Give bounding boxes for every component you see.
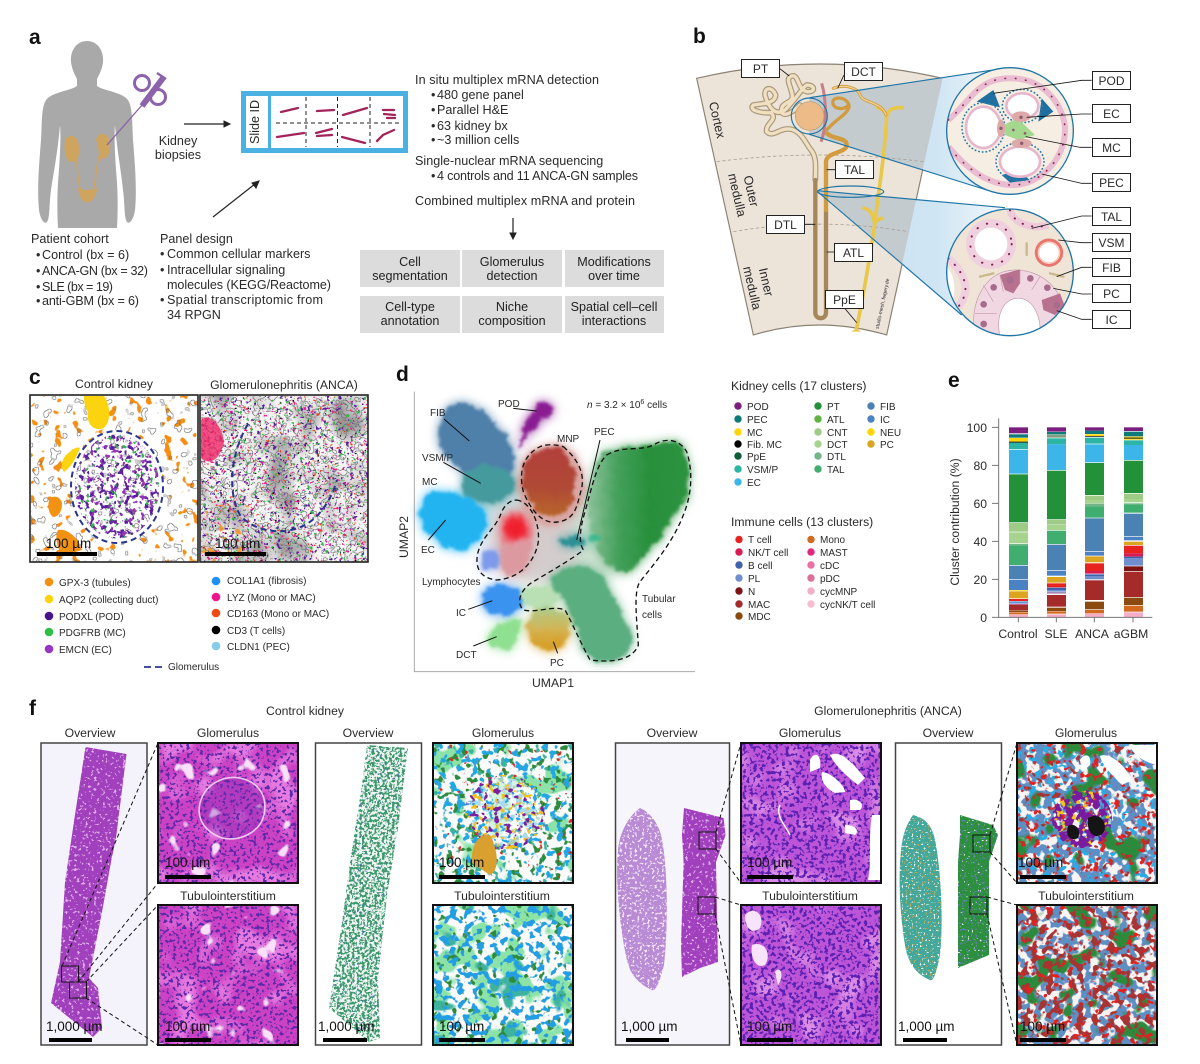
y tick labels: 100 — [967, 421, 987, 435]
text: patient cohort: ANCA-GN (bx = 32) — [42, 264, 148, 278]
legend: immune cells: pDC — [820, 574, 840, 585]
text: assay description: • — [431, 88, 435, 102]
legend: marker genes — [45, 576, 329, 673]
legend: marker genes: AQP2 (collecting duct) — [59, 595, 158, 606]
image: control glomerulus — [30, 395, 198, 562]
bar: ANCA — [1085, 427, 1104, 617]
ANCA cell map glomerulus: 100 µm — [1018, 855, 1063, 870]
UMAP labels: Tubular — [642, 594, 676, 605]
UMAP labels: PC — [550, 658, 564, 669]
region labels: Cortex — [706, 100, 728, 140]
slide with biopsies: Slide ID — [248, 100, 262, 144]
legend: kidney cells: POD — [747, 402, 769, 413]
zoom cones — [809, 68, 1010, 315]
legend: immune cells — [731, 515, 875, 623]
column titles: Tubulointerstitium — [180, 889, 276, 903]
legend: immune cells: T cell — [748, 535, 772, 546]
legend: kidney cells: Fib. MC — [747, 440, 782, 451]
UMAP labels: IC — [456, 608, 466, 619]
cell type label text: PT — [753, 62, 769, 76]
proximal and distal tubules — [752, 76, 886, 318]
y axis title: Cluster contribution (%) — [948, 458, 962, 586]
collecting duct — [857, 107, 902, 328]
zoom cone edge lines — [809, 69, 1005, 315]
analysis boxes: segmentation — [372, 269, 448, 283]
analysis boxes: composition — [478, 314, 546, 328]
leader lines — [428, 408, 600, 653]
analysis boxes: Spatial cell–cell — [571, 300, 657, 314]
legend: kidney cells: PpE — [747, 452, 766, 463]
y tick labels: 60 — [973, 497, 987, 511]
magnified tubulointerstitium — [945, 209, 1073, 337]
heading b: b — [693, 25, 706, 48]
text: patient cohort: • — [36, 294, 40, 308]
text: assay description: Parallel H&E — [437, 103, 508, 117]
control H&E glomerulus: 100 µm — [165, 855, 210, 870]
legend: immune cells: MDC — [748, 612, 771, 623]
x tick labels: aGBM — [1114, 627, 1148, 641]
region labels: medulla — [740, 265, 764, 311]
UMAP labels: FIB — [430, 408, 446, 419]
y tick labels: 20 — [973, 573, 987, 587]
UMAP labels: MNP — [557, 434, 580, 445]
text: assay description — [415, 73, 638, 208]
ANCA cell map glomerulus — [1017, 743, 1157, 883]
connector lines: control — [62, 743, 158, 1045]
ANCA H&E overview: 1,000 µm — [621, 1019, 678, 1034]
text: assay description: Combined multiplex mRNA and protein — [415, 194, 635, 208]
ANCA H&E tubulointerstitium: 100 µm — [747, 1019, 792, 1034]
bar: SLE — [1047, 427, 1066, 617]
kidney biopsies label: Kidney — [159, 134, 198, 148]
leader lines — [779, 68, 1092, 323]
analysis boxes: Modifications — [577, 255, 651, 269]
text: patient cohort: SLE (bx = 19) — [42, 280, 113, 294]
text: assay description: • — [431, 169, 435, 183]
y tick labels: 80 — [973, 459, 987, 473]
icon: biopsy syringe — [107, 73, 166, 145]
clusters — [420, 400, 689, 662]
legend: kidney cells: ATL — [827, 415, 845, 426]
ANCA cell map overview — [896, 743, 1002, 1045]
panel e: stacked bar chart — [948, 369, 1152, 641]
analysis boxes: Niche — [496, 300, 528, 314]
legend: kidney cells: NEU — [880, 428, 901, 439]
x tick labels: ANCA — [1075, 627, 1110, 641]
arrow from panel design — [213, 181, 259, 217]
text: panel design: Panel design — [160, 232, 233, 246]
text: assay description: Single-nuclear mRNA sequencing — [415, 154, 603, 168]
text: patient cohort: • — [36, 248, 40, 262]
glomerulus — [795, 102, 824, 130]
cell type label text: VSM — [1098, 236, 1125, 250]
scale bar: control — [37, 536, 97, 556]
ANCA cell map tubulointerstitium: 100 µm — [1020, 1019, 1065, 1034]
analysis boxes: detection — [486, 269, 538, 283]
analysis boxes — [360, 250, 664, 333]
column titles — [65, 726, 1134, 903]
control H&E tubulointerstitium: 100 µm — [165, 1019, 210, 1034]
group title: control kidney: Control kidney — [266, 704, 345, 718]
scale bar: control: 100 µm — [46, 536, 91, 551]
column titles: Overview — [923, 726, 974, 740]
text: assay description: 4 controls and 11 ANCA-GN samples — [437, 169, 638, 183]
y tick labels — [967, 421, 987, 625]
legend: kidney cells: PEC — [747, 415, 768, 426]
panel a: study design — [29, 26, 664, 333]
cell type label text: DCT — [851, 65, 876, 79]
legend: immune cells: MAST — [820, 548, 848, 559]
text: assay description: 480 gene panel — [437, 88, 524, 102]
text: patient cohort: Control (bx = 6) — [42, 248, 129, 262]
axis title UMAP2: UMAP2 — [397, 516, 411, 558]
control cell map tubulointerstitium — [433, 905, 573, 1045]
ANCA H&E tubulointerstitium — [741, 905, 881, 1045]
cell type label text: TAL — [1101, 210, 1122, 224]
region labels: medulla — [725, 172, 749, 218]
text: assay description: ~3 million cells — [437, 133, 519, 147]
legend: marker genes: CD3 (T cells) — [227, 626, 285, 637]
control cell map glomerulus: 100 µm — [439, 855, 484, 870]
control H&E overview: 1,000 µm — [46, 1019, 103, 1034]
column titles: Glomerulus — [779, 726, 841, 740]
cell type label boxes — [742, 60, 1130, 328]
text: panel design: Spatial transcriptomic from — [167, 293, 323, 307]
text: patient cohort: anti-GBM (bx = 6) — [42, 294, 139, 308]
text: assay description: • — [431, 133, 435, 147]
analysis boxes: Cell — [399, 255, 421, 269]
cell type label text — [753, 62, 1125, 327]
legend: immune cells: B cell — [748, 561, 772, 572]
cell type label text: IC — [1106, 313, 1118, 327]
UMAP labels: DCT — [456, 650, 477, 661]
kidney wedge — [697, 64, 943, 335]
legend: marker genes: PODXL (POD) — [59, 612, 124, 623]
legend: kidney cells: VSM/P — [747, 465, 778, 476]
column titles: Tubulointerstitium — [1038, 889, 1134, 903]
legend: kidney cells: PC — [880, 440, 894, 451]
analysis boxes: annotation — [381, 314, 439, 328]
legend: kidney cells: EC — [747, 478, 761, 489]
legend: immune cells: NK/T cell — [748, 548, 788, 559]
stacked bars — [992, 418, 1152, 622]
legend: marker genes: GPX-3 (tubules) — [59, 578, 131, 589]
analysis boxes: Glomerulus — [480, 255, 544, 269]
heading d: d — [396, 363, 409, 386]
legend: marker genes: CLDN1 (PEC) — [227, 642, 290, 653]
legend: marker genes: PDGFRB (MC) — [59, 628, 126, 639]
column titles: Glomerulus — [472, 726, 534, 740]
x tick labels: Control — [998, 627, 1038, 641]
axes — [414, 392, 695, 672]
icon: patient silhouette with kidneys — [38, 41, 136, 228]
y tick labels: 40 — [973, 535, 987, 549]
text: panel design: • — [160, 247, 164, 261]
heading c: c — [29, 366, 41, 389]
region labels: Outer — [741, 174, 761, 208]
cluster outlines — [477, 440, 691, 661]
legend: immune cells: N — [748, 587, 755, 598]
legend: marker genes: COL1A1 (fibrosis) — [227, 576, 306, 587]
title: control kidney: Control kidney — [75, 377, 154, 391]
arrow to analyses — [510, 218, 516, 239]
UMAP labels: MC — [422, 477, 438, 488]
group title: ANCA: Glomerulonephritis (ANCA) — [814, 704, 962, 718]
slide with biopsies — [244, 93, 406, 151]
text: panel design: Common cellular markers — [167, 247, 310, 261]
text: assay description: • — [431, 103, 435, 117]
control cell map tubulointerstitium: 100 µm — [439, 1019, 484, 1034]
x tick labels: SLE — [1044, 627, 1068, 641]
scale bar: ANCA — [205, 536, 266, 556]
axes and ticks — [992, 418, 1152, 622]
control H&E glomerulus — [158, 743, 298, 883]
legend: immune cells: PL — [748, 574, 761, 585]
text: panel design: • — [160, 263, 164, 277]
cell type label text: FIB — [1102, 261, 1121, 275]
ANCA H&E overview — [616, 743, 730, 1045]
legend: marker genes: Glomerulus — [168, 662, 219, 673]
region labels: studio-mesh, fwgery.de — [875, 278, 891, 330]
UMAP plot — [414, 392, 695, 672]
analysis boxes: interactions — [582, 314, 646, 328]
axis title UMAP1: UMAP1 — [532, 676, 574, 690]
legend: kidney cells — [731, 379, 901, 489]
cell type label text: PpE — [833, 293, 856, 307]
analysis boxes: over time — [588, 269, 640, 283]
cell type label text: TAL — [844, 163, 865, 177]
text: assay description: In situ multiplex mRNA detection — [415, 73, 599, 87]
column titles: Tubulointerstitium — [454, 889, 550, 903]
UMAP labels: n = 3.2 × 10 — [587, 400, 640, 411]
magnified glomerulus — [947, 68, 1073, 194]
cell type label text: ATL — [843, 246, 864, 260]
kidney biopsies label — [155, 134, 201, 162]
text: panel design: • — [160, 293, 164, 307]
UMAP labels: VSM/P — [422, 453, 453, 464]
y tick labels: 0 — [980, 611, 987, 625]
control cell map glomerulus — [433, 743, 573, 883]
scale bar: ANCA: 100 µm — [215, 536, 260, 551]
arrow to slide — [184, 121, 230, 127]
cell type label text: MC — [1102, 141, 1121, 155]
legend: kidney cells: IC — [880, 415, 890, 426]
heading e: e — [948, 369, 960, 392]
column titles: Glomerulus — [197, 726, 259, 740]
text: patient cohort: • — [36, 280, 40, 294]
bar: Control — [1009, 427, 1028, 617]
legend: kidney cells: FIB — [880, 402, 896, 413]
control H&E overview — [41, 743, 147, 1045]
panel b: nephron anatomy — [693, 25, 1130, 337]
panel d: UMAP — [396, 363, 901, 690]
kidney anatomy drawing — [697, 64, 1092, 337]
legend: immune cells: cDC — [820, 561, 839, 572]
cell type label text: PC — [1103, 287, 1120, 301]
text: patient cohort: • — [36, 264, 40, 278]
legend: kidney cells: DTL — [827, 452, 846, 463]
ANCA H&E glomerulus: 100 µm — [747, 855, 792, 870]
column titles: Overview — [343, 726, 394, 740]
UMAP labels: 6 — [640, 399, 644, 406]
ANCA cell map tubulointerstitium — [1017, 905, 1157, 1045]
control H&E tubulointerstitium — [158, 905, 298, 1045]
UMAP labels: PEC — [594, 427, 615, 438]
analysis boxes: Cell-type — [385, 300, 435, 314]
legend: kidney cells: CNT — [827, 428, 848, 439]
connector lines: ANCA — [715, 743, 1017, 1045]
text: panel design: Intracellular signaling — [167, 263, 285, 277]
legend: marker genes: LYZ (Mono or MAC) — [227, 593, 316, 604]
x tick labels — [998, 627, 1148, 641]
UMAP labels: cells — [642, 610, 662, 621]
legend: marker genes: CD163 (Mono or MAC) — [227, 609, 329, 620]
title: glomerulonephritis: Glomerulonephritis (ANCA) — [210, 378, 358, 392]
legend: kidney cells: MC — [747, 428, 763, 439]
control cell map overview: 1,000 µm — [318, 1019, 375, 1034]
legend: immune cells: cycMNP — [820, 587, 858, 598]
text: panel design — [160, 232, 331, 322]
column titles: Overview — [65, 726, 116, 740]
heading f: f — [29, 697, 37, 720]
column titles: Glomerulus — [1055, 726, 1117, 740]
UMAP labels: Lymphocytes — [422, 577, 481, 588]
UMAP labels — [421, 399, 676, 669]
cell type label text: POD — [1098, 74, 1125, 88]
legend: immune cells: Mono — [820, 535, 845, 546]
UMAP labels: cells — [644, 400, 667, 411]
text: patient cohort: Patient cohort — [31, 232, 109, 246]
text: panel design: 34 RPGN — [167, 308, 221, 322]
image: ANCA glomerulus — [200, 395, 368, 562]
cell type label text: PEC — [1099, 176, 1124, 190]
legend: marker genes: EMCN (EC) — [59, 645, 112, 656]
ANCA cell map overview: 1,000 µm — [898, 1019, 955, 1034]
legend: kidney cells: Kidney cells (17 clusters) — [731, 379, 866, 393]
column titles: Tubulointerstitium — [762, 889, 858, 903]
bar: aGBM — [1124, 427, 1143, 617]
panel c: multiplex images — [29, 366, 368, 673]
legend: immune cells: Immune cells (13 clusters) — [731, 515, 873, 529]
legend: immune cells: cycNK/T cell — [820, 600, 875, 611]
legend: kidney cells: TAL — [827, 465, 845, 476]
cell type label text: DTL — [774, 218, 797, 232]
legend: kidney cells: PT — [827, 402, 840, 413]
legend: kidney cells: DCT — [827, 440, 848, 451]
heading a: a — [29, 26, 41, 49]
text: assay description: 63 kidney bx — [437, 119, 508, 133]
panel f: tissue overviews — [29, 697, 1157, 1045]
text: assay description: • — [431, 119, 435, 133]
region labels: Inner — [756, 267, 776, 298]
kidney biopsies label: biopsies — [155, 148, 201, 162]
haze behind clusters — [470, 472, 627, 585]
legend: immune cells: MAC — [748, 600, 770, 611]
UMAP labels: EC — [421, 545, 435, 556]
control cell map overview — [316, 743, 422, 1045]
cell type label text: EC — [1103, 107, 1120, 121]
column titles: Overview — [647, 726, 698, 740]
ANCA H&E glomerulus — [741, 743, 881, 883]
UMAP labels: POD — [498, 399, 520, 410]
text: patient cohort — [31, 232, 148, 308]
region labels — [706, 100, 891, 330]
text: panel design: molecules (KEGG/Reactome) — [167, 278, 331, 292]
